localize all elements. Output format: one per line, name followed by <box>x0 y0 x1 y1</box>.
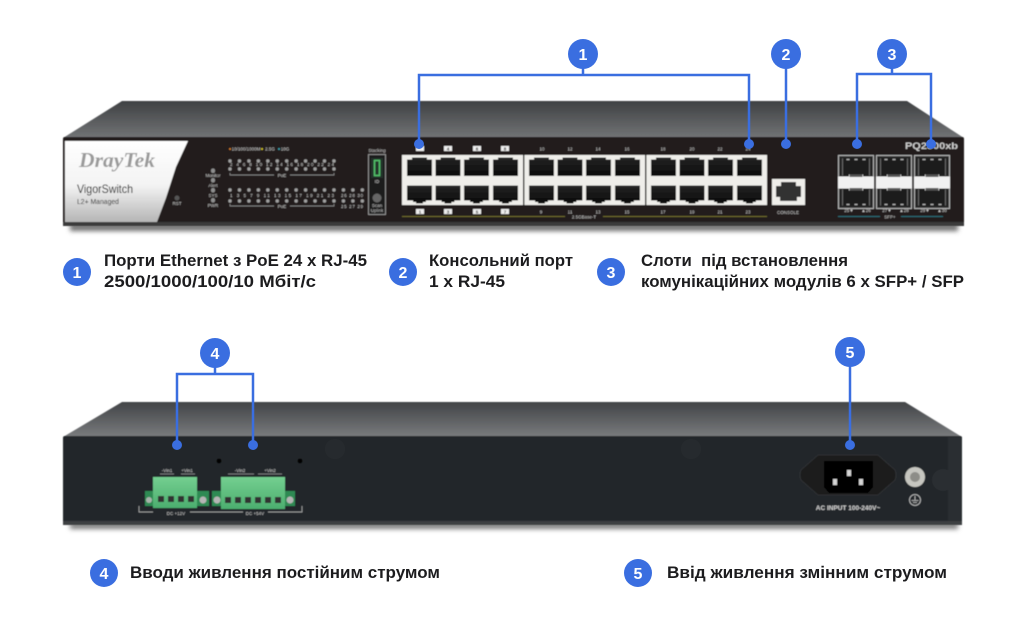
logo plate: L2+ Managed <box>77 197 119 206</box>
port number labels: 7 <box>504 210 507 214</box>
model label: PQ2300xb <box>905 141 959 151</box>
port number labels <box>402 146 767 220</box>
port number labels: 9 <box>540 210 543 214</box>
legend item 4: Вводи живлення постійним струмом <box>130 564 440 582</box>
port number labels: 11 <box>568 210 573 214</box>
port number labels: 13 <box>595 210 601 214</box>
legend item 2 <box>389 252 573 291</box>
port number labels: 3 <box>447 210 450 214</box>
status LEDs: Alert <box>208 183 218 188</box>
DC terminal block 54V: DC +54V <box>246 511 264 516</box>
stacking display: Uplink <box>371 208 384 213</box>
callout 5 line: 5 <box>846 345 855 362</box>
AC power inlet <box>800 455 896 512</box>
legend item 2: Консольний порт <box>429 252 573 270</box>
port number labels: 24 <box>745 146 751 152</box>
rear face <box>63 436 962 525</box>
port LED matrix: 25 27 29 <box>341 204 363 209</box>
front panel switch <box>63 101 964 231</box>
DC terminal block 54V: -Vin2 <box>235 468 246 473</box>
port number labels: 17 <box>660 210 666 214</box>
rear screws and holes <box>216 439 954 491</box>
DC terminal block 54V <box>212 468 302 516</box>
port LED matrix: PoE <box>278 173 286 178</box>
SFP cages: ▲28 <box>899 208 909 213</box>
callout 5 line <box>835 337 865 450</box>
callout 3 bracket <box>852 39 936 149</box>
SFP cages: ▲30 <box>937 208 947 213</box>
port number labels: 4 <box>447 146 450 152</box>
callout 2 line: 2 <box>782 47 791 64</box>
port LED matrix: 10G <box>281 146 290 152</box>
SFP cages: SFP+ <box>884 214 896 220</box>
callout 1 bracket <box>414 39 754 149</box>
console port: CONSOLE <box>777 210 799 215</box>
legend item 1 <box>63 252 367 291</box>
port LED matrix: 1 3 5 7 9 11 13 15 17 19 21 23 <box>230 193 334 198</box>
status LEDs: Monitor <box>205 173 221 178</box>
AC power inlet: AC INPUT 100-240V~ <box>816 505 880 512</box>
callout 4 bracket <box>172 338 258 450</box>
port number labels: 1 <box>419 210 422 214</box>
port LED matrix: PoE <box>278 204 286 209</box>
legend item 5: Ввід живлення змінним струмом <box>667 564 947 582</box>
port number labels: 15 <box>624 210 630 214</box>
status LEDs <box>172 170 221 208</box>
stacking display: ID <box>375 179 380 184</box>
legend item 1: 1 <box>73 265 82 282</box>
callout 4 bracket: 4 <box>211 346 220 363</box>
logo plate: DrayTek <box>78 148 156 172</box>
legend item 3: Слоти під встановлення <box>641 252 848 270</box>
DC terminal block 12V: -Vin1 <box>162 468 173 473</box>
SFP cages: 27▼ <box>882 208 892 213</box>
port number labels: 2.5GBase-T <box>572 214 596 220</box>
SFP cages <box>838 156 950 220</box>
DC terminal block 54V: +Vin2 <box>264 468 276 473</box>
status LEDs: RST <box>172 201 182 206</box>
status LEDs: PWR <box>208 203 219 208</box>
ground screw and symbol <box>905 467 925 506</box>
DC terminal block 12V <box>139 468 215 516</box>
port number labels: 18 <box>660 146 666 152</box>
legend item 3: комунікаційних модулів 6 x SFP+ / SFP <box>641 273 964 291</box>
callout 2 line <box>771 39 801 149</box>
legend item 5 <box>624 559 947 587</box>
legend item 2: 2 <box>399 265 408 282</box>
port number labels: 5 <box>476 210 479 214</box>
stacking display <box>368 148 386 214</box>
port number labels: 12 <box>567 146 573 152</box>
port LED matrix: 2 4 6 8 10 12 14 16 18 20 22 24 <box>230 162 334 167</box>
port number labels: 10 <box>539 146 545 152</box>
port number labels: 23 <box>745 210 751 214</box>
RJ-45 port blocks <box>402 155 767 205</box>
switch front face <box>63 137 964 226</box>
port number labels: 21 <box>717 210 723 214</box>
stacking display: Stacking <box>368 148 386 153</box>
port number labels: 16 <box>624 146 630 152</box>
port number labels: 6 <box>476 146 479 152</box>
legend item 1: 2500/1000/100/10 Мбіт/с <box>104 273 316 291</box>
switch top surface <box>63 101 964 138</box>
SFP cages: 25▼ <box>844 208 854 213</box>
port number labels: 14 <box>595 146 601 152</box>
port number labels: 8 <box>504 146 507 152</box>
callout 3 bracket: 3 <box>888 47 897 64</box>
legend item 1: Порти Ethernet з PoE 24 x RJ-45 <box>104 252 367 270</box>
legend item 3: 3 <box>607 265 616 282</box>
callout 1 bracket: 1 <box>579 47 588 64</box>
legend item 4: 4 <box>100 566 109 583</box>
legend item 4 <box>90 559 440 587</box>
legend item 5: 5 <box>634 566 643 583</box>
port LED matrix: 26 28 30 <box>341 193 363 198</box>
port number labels: 19 <box>689 210 695 214</box>
DC terminal block 12V: DC +12V <box>167 511 185 516</box>
rear panel switch <box>63 402 962 529</box>
SFP cages: ▲26 <box>861 208 871 213</box>
rear top surface <box>63 402 962 437</box>
legend item 2: 1 x RJ-45 <box>429 273 505 291</box>
logo plate: VigorSwitch <box>77 182 133 196</box>
logo plate <box>65 141 188 222</box>
port number labels: 20 <box>689 146 695 152</box>
DC terminal block 12V: +Vin1 <box>181 468 193 473</box>
port LED matrix: 2.5G <box>265 146 275 152</box>
port LED matrix: 10/100/1000M <box>232 146 261 152</box>
legend item 3 <box>597 252 964 291</box>
stacking display: Scan <box>372 203 383 208</box>
console port <box>772 179 805 215</box>
status LEDs: SYS <box>208 193 218 198</box>
SFP cages: 29▼ <box>920 208 930 213</box>
port LED matrix <box>229 146 363 209</box>
port number labels: 22 <box>717 146 723 152</box>
